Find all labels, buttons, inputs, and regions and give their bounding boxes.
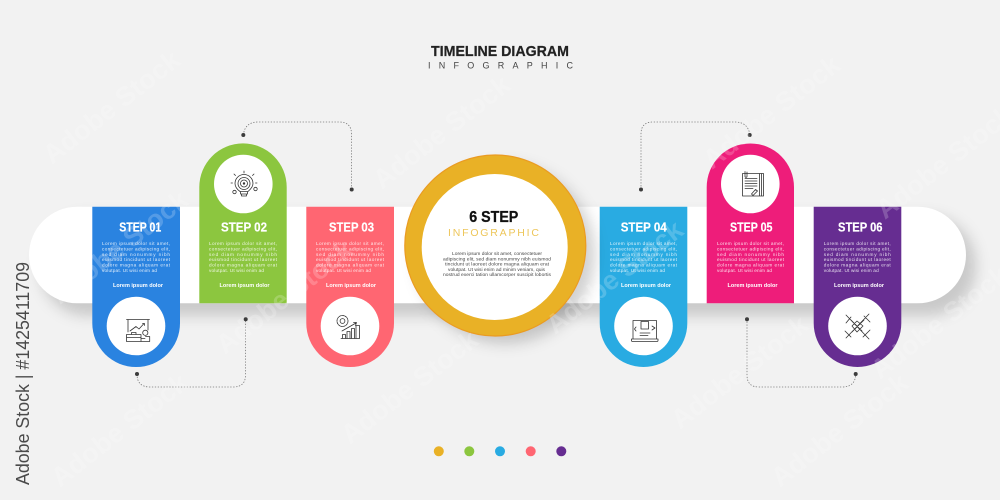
text block: step 01 body: volutpat. Ut wisi enim ad: [102, 268, 157, 273]
icon: joined hands: [828, 297, 887, 355]
icon: light bulb with target: [214, 155, 273, 213]
text block: step 04 body: [610, 241, 678, 273]
text block: central body: volutpat. Ut wisi enim ad minim veniam, quis: [448, 267, 546, 273]
text block: step 05 body: euismod tincidunt ut laoreet: [717, 257, 785, 262]
text block: step 01 body: Lorem ipsum dolor sit amet,: [102, 241, 170, 246]
title: TIMELINE DIAGRAM: [431, 43, 569, 60]
watermark pattern: Adobe Stock: [367, 69, 517, 195]
watermark pattern: Adobe Stock: [540, 214, 690, 340]
text block: step 01 body: euismod tincidunt ut laoreet: [102, 257, 171, 262]
text block: step 06 body: euismod tincidunt ut laoreet: [824, 257, 891, 262]
text block: step 04 body: euismod tincidunt ut laoreet: [610, 257, 678, 262]
text block: step 03 body: dolore magna aliquam erat: [316, 262, 385, 268]
text block: central body: Lorem ipsum dolor sit amet, consectetuer: [452, 251, 542, 257]
text block: step 01 body: consectetuer adipiscing elit,: [102, 246, 170, 251]
panel: step 03: [306, 207, 394, 367]
heading: step 02: STEP 02: [221, 220, 267, 234]
text block: step 05 body: consectetuer adipiscing elit,: [717, 246, 784, 251]
watermark pattern: Adobe Stock: [765, 367, 915, 493]
text block: step 02 body: Lorem ipsum dolor sit amet,: [209, 241, 277, 246]
text block: step 02 body: euismod tincidunt ut laoreet: [209, 257, 278, 262]
heading: step 04: STEP 04: [621, 220, 667, 234]
label: step 04: Lorem ipsum dolor: [621, 283, 672, 289]
text block: step 05 body: [717, 241, 785, 273]
heading: step 06: STEP 06: [838, 220, 883, 234]
watermark pattern: Adobe Stock: [665, 309, 815, 435]
watermark pattern: Adobe Stock: [697, 49, 847, 175]
text block: step 01 body: [102, 241, 171, 273]
panel: step 01: [92, 207, 180, 367]
heading: 6 step: 6 STEP: [469, 209, 519, 226]
text block: step 05 body: sed diam nonummy nibh: [717, 252, 784, 257]
connector: step 1 to step 2: [135, 317, 248, 387]
text block: step 04 body: volutpat. Ut wisi enim ad: [610, 268, 665, 273]
text block: step 04 body: sed diam nonummy nibh: [610, 252, 677, 257]
icon: laptop with code: [614, 297, 673, 355]
text block: step 04 body: Lorem ipsum dolor sit amet,: [610, 241, 677, 246]
text block: step 04 body: dolore magna aliquam erat: [610, 262, 678, 268]
label: step 06: Lorem ipsum dolor: [834, 283, 885, 289]
band: central white timeline bar: [29, 207, 976, 316]
text block: step 03 body: [316, 241, 385, 273]
text block: central body: [443, 251, 552, 278]
text block: step 01 body: dolore magna aliquam erat: [102, 262, 171, 268]
watermark pattern: Adobe Stock: [37, 44, 187, 170]
text block: step 06 body: Lorem ipsum dolor sit amet,: [824, 241, 891, 246]
text block: step 02 body: volutpat. Ut wisi enim ad: [209, 268, 264, 273]
text block: step 05 body: Lorem ipsum dolor sit amet,: [717, 241, 784, 246]
text block: central body: adipiscing elit, sed diam nonummy nibh euismod: [443, 256, 551, 262]
watermark pattern: Adobe Stock: [45, 367, 195, 493]
text block: step 03 body: volutpat. Ut wisi enim ad: [316, 268, 371, 273]
panel: step 02: [199, 143, 287, 303]
label: step 03: Lorem ipsum dolor: [326, 283, 377, 289]
icon: notebook with clip: [721, 155, 780, 213]
text block: step 02 body: [209, 241, 278, 273]
text block: step 06 body: volutpat. Ut wisi enim ad: [824, 268, 879, 273]
text block: step 04 body: consectetuer adipiscing elit,: [610, 246, 677, 251]
text block: step 06 body: dolore magna aliquam erat: [824, 262, 891, 268]
legend dots: [434, 446, 566, 456]
stock id caption: Adobe Stock | #1425411709: [13, 262, 33, 485]
text block: step 03 body: sed diam nonummy nibh: [316, 252, 384, 257]
text block: step 06 body: sed diam nonummy nibh: [824, 252, 891, 257]
text block: step 06 body: [824, 241, 891, 273]
heading: step 05: STEP 05: [730, 220, 773, 234]
heading: step 01: STEP 01: [119, 220, 161, 234]
watermark pattern: Adobe Stock: [210, 234, 360, 360]
heading: step 03: STEP 03: [329, 220, 374, 234]
label: step 01: Lorem ipsum dolor: [113, 283, 164, 289]
connector: step 2 to step 3: [241, 122, 354, 192]
text block: central body: nostrud exerci tation ullamcorper suscipit lobortis: [443, 272, 552, 278]
icon: presentation board and briefcase: [107, 297, 165, 355]
subheading: infographic: INFOGRAPHIC: [448, 227, 539, 239]
subtitle: INFOGRAPHIC: [428, 60, 574, 70]
text block: step 02 body: dolore magna aliquam erat: [209, 262, 278, 268]
label: step 05: Lorem ipsum dolor: [728, 283, 778, 289]
watermark pattern: Adobe Stock: [45, 184, 195, 310]
text block: step 05 body: dolore magna aliquam erat: [717, 262, 785, 268]
text block: central body: tincidunt ut laoreet dolore magna aliquam erat: [445, 262, 550, 268]
text block: step 06 body: consectetuer adipiscing elit,: [824, 246, 891, 251]
watermark pattern: Adobe Stock: [335, 324, 485, 450]
text block: step 03 body: euismod tincidunt ut laoreet: [316, 257, 385, 262]
connector: step 5 to step 6: [745, 317, 858, 387]
icon: gear and rising bars: [321, 297, 379, 355]
text block: step 01 body: sed diam nonummy nibh: [102, 252, 170, 257]
text block: step 02 body: consectetuer adipiscing elit,: [209, 246, 277, 251]
panel: step 05: [707, 143, 794, 303]
panel: central circle: [405, 155, 595, 344]
label: step 02: Lorem ipsum dolor: [220, 283, 270, 289]
connector: step 4 to step 5: [639, 122, 752, 192]
text block: step 03 body: Lorem ipsum dolor sit amet,: [316, 241, 384, 246]
text block: step 05 body: volutpat. Ut wisi enim ad: [717, 268, 772, 273]
text block: step 02 body: sed diam nonummy nibh: [209, 252, 277, 257]
panel: step 04: [600, 207, 687, 367]
text block: step 03 body: consectetuer adipiscing elit,: [316, 246, 384, 251]
panel: step 06: [814, 207, 901, 367]
